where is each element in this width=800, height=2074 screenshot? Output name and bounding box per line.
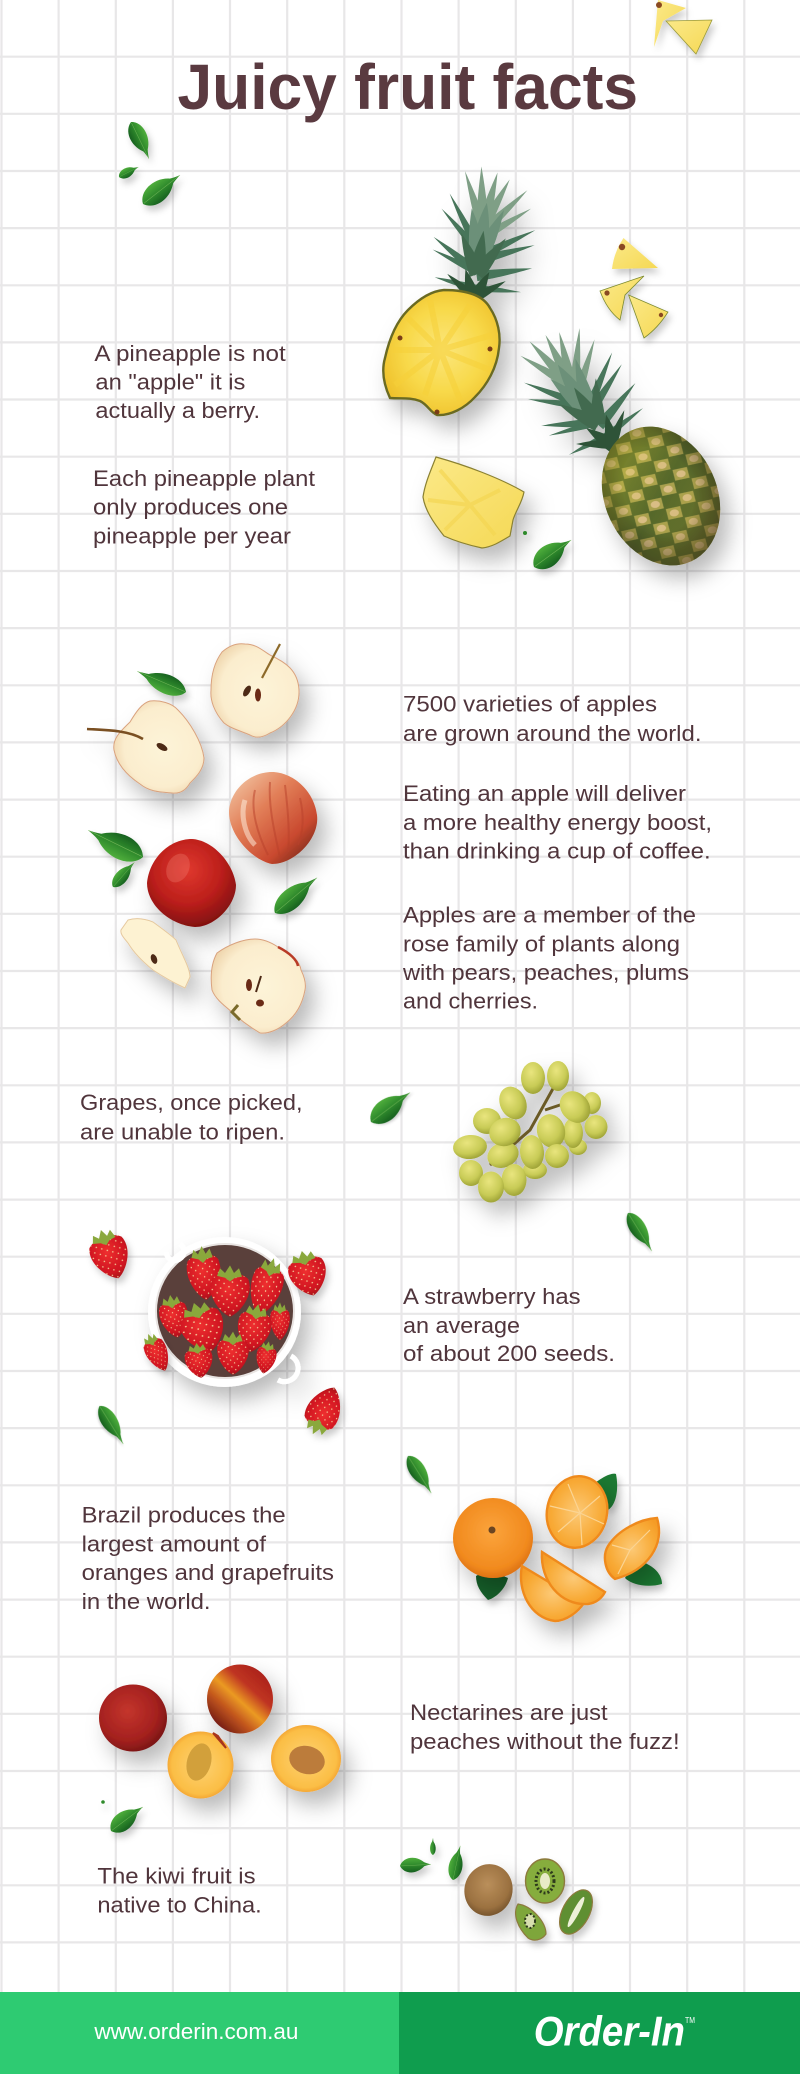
text: strawberry fact: A strawberry has [403, 1284, 581, 1309]
loose strawberries [83, 1224, 350, 1441]
text: grapes fact: Grapes, once picked, [80, 1090, 302, 1115]
illustration: strawberry bowl [83, 1224, 350, 1441]
text: Brazil oranges fact: oranges and grapefruits [82, 1560, 334, 1585]
icon: leaf below peaches [101, 1799, 148, 1838]
kiwi long slice [553, 1884, 599, 1940]
leaf [523, 531, 577, 575]
text: apple energy fact: a more healthy energy boost, [403, 810, 712, 835]
text: apple rose family fact: with pears, peaches, plums [402, 960, 689, 985]
text: nectarines fact [410, 1700, 680, 1754]
text: Brazil oranges fact [82, 1503, 334, 1614]
blushed peach [207, 1664, 273, 1734]
text: apple varieties fact [403, 692, 702, 746]
apple half two [87, 701, 204, 793]
icon: pineapple chunks top right [654, 0, 712, 54]
dark peach [99, 1684, 167, 1752]
icon: leaf below strawberries [93, 1402, 130, 1448]
text: apple varieties fact: are grown around the world. [403, 721, 702, 746]
text: apple energy fact: Eating an apple will deliver [403, 781, 686, 806]
kiwi slice [526, 1859, 564, 1903]
illustration: apples group [83, 644, 323, 1033]
bowl [148, 1237, 301, 1387]
peach half one [168, 1732, 234, 1798]
text: kiwi fact: native to China. [97, 1893, 262, 1918]
text: apple varieties fact: 7500 varieties of apples [403, 692, 657, 717]
pineapple chunks [600, 238, 668, 338]
text: kiwi fact: The kiwi fruit is [97, 1864, 256, 1889]
illustration: oranges [453, 1471, 662, 1621]
orange wedges [521, 1552, 605, 1621]
text: apple energy fact: than drinking a cup of coffee. [403, 839, 711, 864]
text: Brazil oranges fact: Brazil produces the [82, 1503, 286, 1528]
text: kiwi fact [97, 1864, 262, 1918]
text: apple rose family fact [402, 903, 696, 1014]
orange leaves [476, 1474, 662, 1600]
title: Juicy fruit facts [178, 51, 638, 123]
whole orange [453, 1498, 533, 1578]
illustration: kiwis [400, 1838, 599, 1940]
text: apple rose family fact: rose family of plants along [403, 932, 680, 957]
striped apple [229, 772, 317, 864]
whole kiwi [459, 1859, 518, 1921]
text: pineapple berry fact: A pineapple is not [94, 341, 286, 366]
orange slice [540, 1471, 614, 1553]
strawberries in bowl [156, 1245, 290, 1380]
logo: Order-In [534, 2008, 685, 2055]
trademark: TM [685, 2016, 695, 2025]
text: apple energy fact [403, 781, 712, 864]
text: strawberry fact: an average [403, 1313, 520, 1338]
orange half moon [605, 1518, 659, 1579]
icon: leaves top left [117, 118, 186, 212]
text: grapes fact [80, 1090, 302, 1144]
icon: leaf above oranges [402, 1452, 438, 1497]
illustration: peaches [99, 1664, 341, 1798]
text: pineapple berry fact: actually a berry. [95, 398, 260, 423]
text: strawberry fact: of about 200 seeds. [403, 1341, 615, 1366]
icon: leaf beside grapes [364, 1084, 416, 1130]
text: pineapple berry fact: an "apple" it is [95, 370, 245, 395]
whole pineapple [495, 304, 742, 585]
website url: www.orderin.com.au [93, 2019, 298, 2044]
text: Brazil oranges fact: in the world. [82, 1589, 211, 1614]
pineapple wedge [423, 457, 524, 548]
text: grapes fact: are unable to ripen. [80, 1119, 285, 1144]
apple half one [211, 644, 299, 737]
halved pineapple [383, 161, 545, 415]
text: pineapple plant fact [93, 466, 315, 548]
footer bar [0, 1992, 800, 2074]
apple half three [211, 939, 305, 1033]
text: pineapple plant fact: Each pineapple plant [93, 466, 315, 491]
leaf cluster [83, 663, 323, 921]
text: pineapple plant fact: pineapple per year [93, 523, 291, 548]
text: apple rose family fact: Apples are a member of the [403, 903, 696, 928]
peach half two [271, 1725, 341, 1792]
text: pineapple plant fact: only produces one [93, 495, 288, 520]
illustration: pineapple group [383, 161, 742, 585]
footer right panel [399, 1992, 800, 2074]
text: nectarines fact: Nectarines are just [410, 1700, 608, 1725]
text: pineapple berry fact [94, 341, 286, 423]
apple slice [121, 919, 190, 988]
kiwi wedge [516, 1904, 546, 1940]
kiwi leaves [400, 1838, 467, 1881]
text: apple rose family fact: and cherries. [403, 989, 538, 1014]
red apple [147, 839, 236, 927]
text: strawberry fact [403, 1284, 615, 1366]
footer left panel [0, 1992, 399, 2074]
illustration: grapes [452, 1061, 608, 1202]
text: Brazil oranges fact: largest amount of [82, 1532, 267, 1557]
text: nectarines fact: peaches without the fuzz! [410, 1729, 680, 1754]
icon: leaf right of grapes [622, 1209, 659, 1255]
